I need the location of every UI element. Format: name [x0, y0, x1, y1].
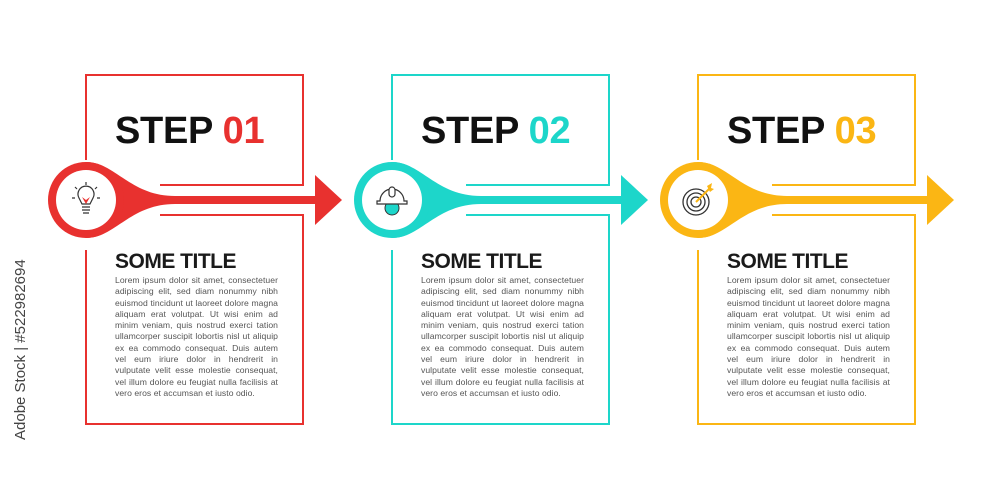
subtitle: SOME TITLE	[727, 250, 848, 273]
panel: step 01	[48, 74, 342, 425]
subtitle: SOME TITLE	[421, 250, 542, 273]
text block: Lorem ipsum dolor sit amet, consectetuer adipiscing elit, sed diam nonummy nibh euismod tincidunt ut laoreet dolore magna aliquam erat volutpat. Ut wisi enim ad minim veniam, quis nostrud exerci tation ullamcorper suscipit lobortis nisl ut aliquip ex ea commodo consequat. Duis autem vel eum iriure dolor in hendrerit in vulputate velit esse molestie consequat, vel illum dolore eu feugiat nulla facilisis at vero eros et accumsan et iusto odio.	[115, 275, 278, 398]
icon: light bulb	[56, 170, 116, 230]
heading: STEP 01	[115, 110, 264, 152]
icon: target	[668, 170, 728, 230]
text block: Lorem ipsum dolor sit amet, consectetuer adipiscing elit, sed diam nonummy nibh euismod tincidunt ut laoreet dolore magna aliquam erat volutpat. Ut wisi enim ad minim veniam, quis nostrud exerci tation ullamcorper suscipit lobortis nisl ut aliquip ex ea commodo consequat. Duis autem vel eum iriure dolor in hendrerit in vulputate velit esse molestie consequat, vel illum dolore eu feugiat nulla facilisis at vero eros et accumsan et iusto odio.	[727, 275, 890, 398]
heading: STEP 03	[727, 110, 876, 152]
icon: helmet gear	[362, 170, 422, 230]
watermark label: Adobe Stock | #522982694	[12, 259, 29, 440]
text block: Lorem ipsum dolor sit amet, consectetuer adipiscing elit, sed diam nonummy nibh euismod tincidunt ut laoreet dolore magna aliquam erat volutpat. Ut wisi enim ad minim veniam, quis nostrud exerci tation ullamcorper suscipit lobortis nisl ut aliquip ex ea commodo consequat. Duis autem vel eum iriure dolor in hendrerit in vulputate velit esse molestie consequat, vel illum dolore eu feugiat nulla facilisis at vero eros et accumsan et iusto odio.	[421, 275, 584, 398]
panel: step 03	[660, 74, 954, 425]
panel: step 02	[354, 74, 648, 425]
arrow	[354, 162, 648, 238]
arrow	[660, 162, 954, 238]
subtitle: SOME TITLE	[115, 250, 236, 273]
arrow	[48, 162, 342, 238]
heading: STEP 02	[421, 110, 570, 152]
